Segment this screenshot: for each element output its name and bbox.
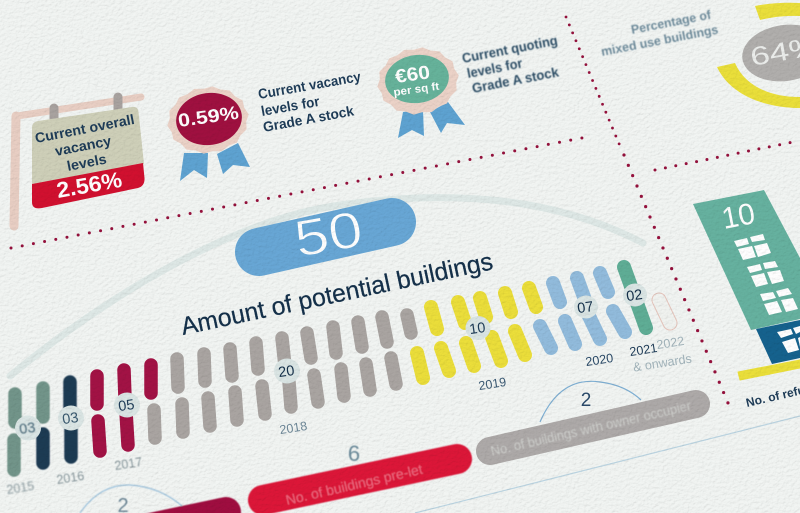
heading: Amount of potential buildings xyxy=(178,247,495,341)
icon: rosette €60 per sq ft: per sq ft xyxy=(393,81,440,99)
callout: pre-let xyxy=(263,441,457,508)
text: current vacancy levels: Current vacancy xyxy=(257,68,362,102)
value labels xyxy=(18,287,644,438)
value badges xyxy=(15,284,647,440)
dotted divider: horizontal left xyxy=(11,136,592,248)
year labels: 2016 xyxy=(56,469,85,487)
text: current quoting levels: levels for xyxy=(466,55,524,81)
year labels: & onwards xyxy=(632,352,693,375)
year labels xyxy=(6,334,693,497)
callout: lower-left crimson pill xyxy=(80,485,226,513)
icon: rosette 0.59% xyxy=(164,83,252,181)
bars: 2017 xyxy=(97,365,151,451)
dotted divider: horizontal right xyxy=(655,141,798,170)
text: percentage of mixed use buildings: Percentage of xyxy=(630,8,713,37)
bars: 2019 xyxy=(417,288,536,378)
icon: rosette €60 per sq ft: €60 xyxy=(394,62,431,88)
callout: pre-let: 6 xyxy=(348,441,360,466)
icon: refurbished building xyxy=(693,190,800,380)
value labels: 20 xyxy=(277,363,296,381)
icon: vacancy sign xyxy=(14,97,145,226)
text: current vacancy levels xyxy=(257,68,362,135)
bar: 2022 onwards outline xyxy=(659,300,670,323)
bars: 2016 xyxy=(43,382,71,463)
value labels: 07 xyxy=(576,299,595,317)
text: current quoting levels: Grade A stock xyxy=(471,64,560,96)
value labels: 03 xyxy=(18,420,37,438)
year labels: 2020 xyxy=(585,351,614,369)
year labels: 2018 xyxy=(279,419,308,437)
bar: 2021 xyxy=(624,267,646,328)
year labels: 2019 xyxy=(478,375,507,393)
thin blue rule xyxy=(415,416,800,513)
value labels: 03 xyxy=(61,410,80,428)
faint arc behind the headline xyxy=(10,198,643,376)
value labels: 05 xyxy=(117,397,136,415)
icon: rosette €60 per sq ft xyxy=(374,44,465,138)
pill: total 50 xyxy=(259,200,392,268)
text: current vacancy levels: Grade A stock xyxy=(262,102,355,135)
icon: vacancy sign: vacancy xyxy=(54,132,113,159)
bars: 2018 xyxy=(154,315,411,438)
year labels: 2022 xyxy=(656,334,685,352)
icon: refurbished building: 10 xyxy=(719,197,758,236)
text: percentage of mixed use buildings: mixed use buildings xyxy=(600,22,719,59)
icon: vacancy sign: 2.56% xyxy=(55,167,124,203)
bars: 2015 xyxy=(14,388,43,470)
bar chart: buildings by year xyxy=(14,267,670,470)
text: current quoting levels: Current quoting xyxy=(461,33,559,66)
callout: owner occupier: No. of buildings with owner occupier xyxy=(489,398,693,459)
icon: vacancy sign: Current overall xyxy=(34,111,136,146)
text: current vacancy levels: levels for xyxy=(260,93,321,119)
year labels: 2021 xyxy=(629,341,658,359)
pill: total 50: 50 xyxy=(290,200,367,268)
year labels: 2015 xyxy=(6,479,35,497)
callout: owner occupier: 2 xyxy=(581,390,591,411)
year labels: 2017 xyxy=(114,455,143,473)
bars: 2020 xyxy=(540,273,625,348)
value labels: 10 xyxy=(468,320,487,338)
dotted divider: diagonal upper xyxy=(566,17,620,146)
value labels: 02 xyxy=(625,287,644,305)
dotted divider: diagonal lower xyxy=(624,155,728,403)
icon: rosette 0.59%: 0.59% xyxy=(177,102,240,131)
callout: pre-let: No. of buildings pre-let xyxy=(284,461,424,508)
icon: vacancy sign: levels xyxy=(66,151,108,174)
text: current quoting levels xyxy=(461,33,560,96)
donut chart: 64% xyxy=(717,3,800,108)
